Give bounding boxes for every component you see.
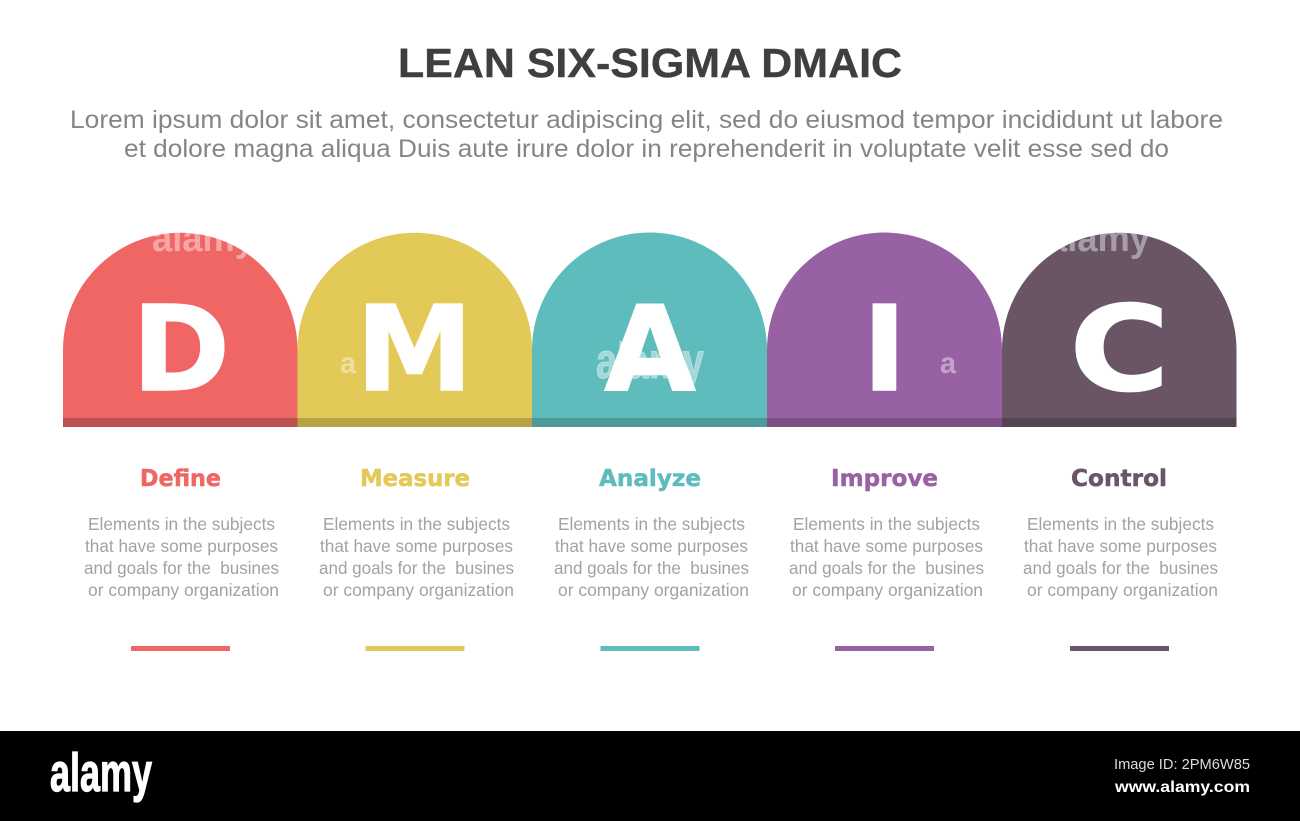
panel: Control text: and goals for the busines bbox=[1023, 558, 1218, 578]
panel: M arch: M bbox=[356, 280, 473, 418]
panel: C arch: alamy bbox=[1047, 218, 1150, 260]
title: LEAN SIX-SIGMA DMAIC bbox=[398, 40, 902, 86]
footer bar: Image ID: 2PM6W85 bbox=[1114, 756, 1250, 773]
panel: Improve text: Elements in the subjects bbox=[793, 514, 980, 534]
panel: A arch: alamy bbox=[596, 333, 704, 389]
subtitle text block: Lorem ipsum dolor sit amet, consectetur adipiscing elit, sed do eiusmod tempor incididunt ut labore bbox=[70, 106, 1223, 134]
panel: I arch: I bbox=[863, 280, 906, 418]
panel: Measure text: and goals for the busines bbox=[319, 558, 514, 578]
panel: D arch bbox=[63, 218, 298, 427]
panel: C arch: C bbox=[1070, 280, 1170, 418]
panel: Improve text: and goals for the busines bbox=[789, 558, 984, 578]
panel: Improve text: that have some purposes bbox=[790, 536, 983, 556]
panel: Define text: and goals for the busines bbox=[84, 558, 279, 578]
panel: C arch bbox=[1002, 218, 1236, 427]
panel: Define text: Define bbox=[140, 466, 221, 492]
panel: Analyze text: Analyze bbox=[599, 466, 701, 492]
panel: D arch: alamy bbox=[152, 218, 255, 260]
panel: M arch bbox=[298, 233, 532, 427]
panel: Control text: Control bbox=[1071, 466, 1167, 492]
panel: Define text: that have some purposes bbox=[85, 536, 278, 556]
panel: Define text: Elements in the subjects bbox=[88, 514, 275, 534]
subtitle text block bbox=[70, 106, 1223, 163]
panel: Control text: or company organization bbox=[1027, 580, 1218, 600]
panel: D arch: D bbox=[132, 280, 230, 418]
panel: Define text: or company organization bbox=[88, 580, 279, 600]
panel: Measure text: Measure bbox=[360, 466, 470, 492]
panel: Analyze text: and goals for the busines bbox=[554, 558, 749, 578]
panel: Define text bbox=[84, 466, 279, 651]
footer bar: alamy bbox=[50, 743, 152, 803]
panel: Control text: Elements in the subjects bbox=[1027, 514, 1214, 534]
panel: A arch bbox=[532, 232, 767, 427]
footer bar bbox=[0, 731, 1300, 821]
footer bar: www.alamy.com bbox=[1114, 779, 1250, 796]
panel: Analyze text bbox=[554, 466, 749, 651]
panel: A arch: A bbox=[604, 280, 696, 418]
panel: Analyze text: Elements in the subjects bbox=[558, 514, 745, 534]
panel: Improve text: Improve bbox=[831, 466, 938, 492]
panel: Analyze text: that have some purposes bbox=[555, 536, 748, 556]
panel: M arch: a bbox=[340, 347, 356, 380]
panel: Measure text: that have some purposes bbox=[320, 536, 513, 556]
panel: Control text bbox=[1023, 466, 1218, 651]
panel: Analyze text: or company organization bbox=[558, 580, 749, 600]
panel: Measure text: Elements in the subjects bbox=[323, 514, 510, 534]
subtitle text block: et dolore magna aliqua Duis aute irure dolor in reprehenderit in voluptate velit esse sed do bbox=[124, 135, 1169, 163]
panel: Measure text: or company organization bbox=[323, 580, 514, 600]
panel: I arch: a bbox=[940, 347, 956, 380]
panel: Measure text bbox=[319, 466, 514, 651]
panel: I arch bbox=[767, 232, 1002, 427]
panel: Improve text: or company organization bbox=[792, 580, 983, 600]
panel: Improve text bbox=[789, 466, 984, 651]
panel: Control text: that have some purposes bbox=[1024, 536, 1217, 556]
